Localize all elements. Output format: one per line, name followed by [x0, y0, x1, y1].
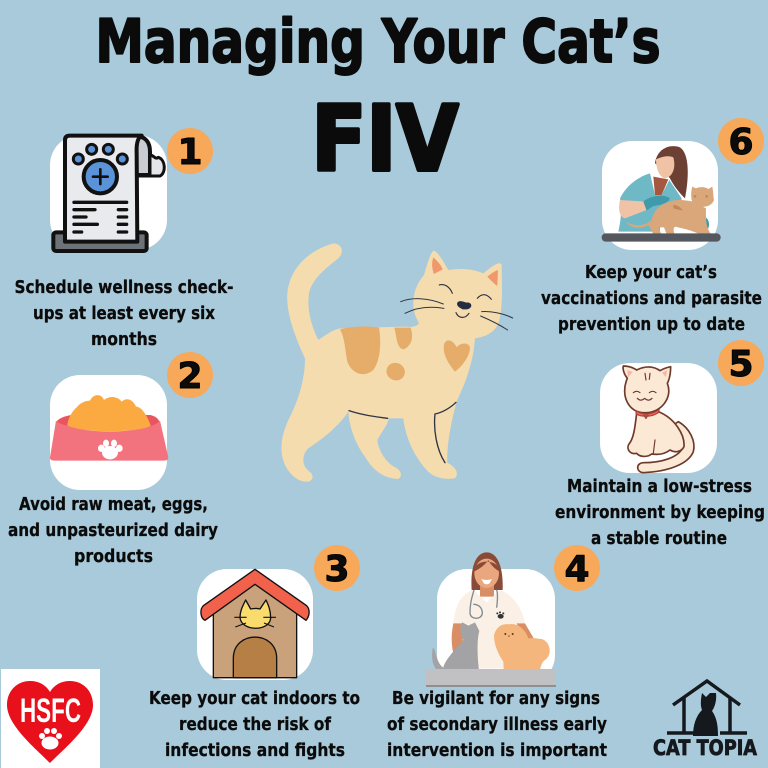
- icon: veterinary report: [53, 136, 164, 251]
- number badge 1: [167, 128, 213, 174]
- central cat illustration: [281, 243, 513, 482]
- number badge 5: [718, 340, 764, 386]
- number badge 1: 1: [177, 132, 203, 173]
- text: step 2: products: [74, 546, 153, 567]
- text: step 2: and unpasteurized dairy: [8, 520, 218, 541]
- number badge 4: 4: [564, 549, 590, 590]
- text: step 3: [149, 688, 360, 761]
- icon: vet with cat and dog: [426, 552, 556, 687]
- text: step 5: a stable routine: [591, 528, 727, 549]
- icon background card: [437, 569, 555, 685]
- text: step 5: [555, 476, 765, 549]
- icon: vet treating cat: [602, 146, 721, 242]
- text: step 3: infections and fights: [165, 740, 345, 761]
- text: step 1: ups at least every six: [33, 303, 215, 324]
- title: FIV: [312, 87, 459, 192]
- text: step 4: Be vigilant for any signs: [392, 688, 600, 709]
- text: step 1: months: [91, 329, 157, 350]
- icon background card: [602, 141, 718, 250]
- icon background card: [600, 363, 717, 473]
- number badge 2: 2: [177, 356, 203, 397]
- text: step 6: [541, 262, 762, 335]
- text: step 1: Schedule wellness check-: [14, 277, 234, 298]
- number badge 4: [554, 545, 600, 591]
- panel: step 2 diet: [8, 352, 218, 567]
- icon: cat house: [201, 569, 309, 678]
- number badge 6: [718, 118, 764, 164]
- icon: sitting kitten: [623, 366, 694, 473]
- text: step 3: Keep your cat indoors to: [149, 688, 360, 709]
- icon background card: [50, 135, 167, 250]
- text: step 6: Keep your cat’s: [585, 262, 717, 283]
- number badge 3: [314, 545, 360, 591]
- panel: step 4 vigilance: [387, 545, 607, 761]
- logo: HSFC heart: HSFC: [20, 692, 81, 730]
- text: step 2: Avoid raw meat, eggs,: [19, 494, 208, 515]
- text: step 4: [387, 688, 607, 761]
- panel: step 6 vaccinations: [541, 118, 764, 335]
- text: step 4: intervention is important: [387, 740, 607, 761]
- logo: HSFC heart: [1, 669, 100, 768]
- number badge 6: 6: [728, 122, 754, 163]
- text: step 2: [8, 494, 218, 567]
- title: [96, 7, 660, 192]
- number badge 5: 5: [728, 344, 754, 385]
- icon background card: [50, 375, 167, 490]
- panel: step 3 indoors: [149, 545, 360, 761]
- text: step 3: reduce the risk of: [179, 714, 331, 735]
- panel: step 1 wellness check-ups: [14, 128, 234, 350]
- number badge 3: 3: [324, 549, 350, 590]
- text: step 4: of secondary illness early: [387, 714, 607, 735]
- logo: Cat Topia: [653, 681, 758, 760]
- panel: step 5 low stress: [555, 340, 765, 549]
- text: step 1: [14, 277, 234, 350]
- icon background card: [197, 569, 313, 680]
- number badge 2: [167, 352, 213, 398]
- icon: food bowl: [50, 395, 168, 461]
